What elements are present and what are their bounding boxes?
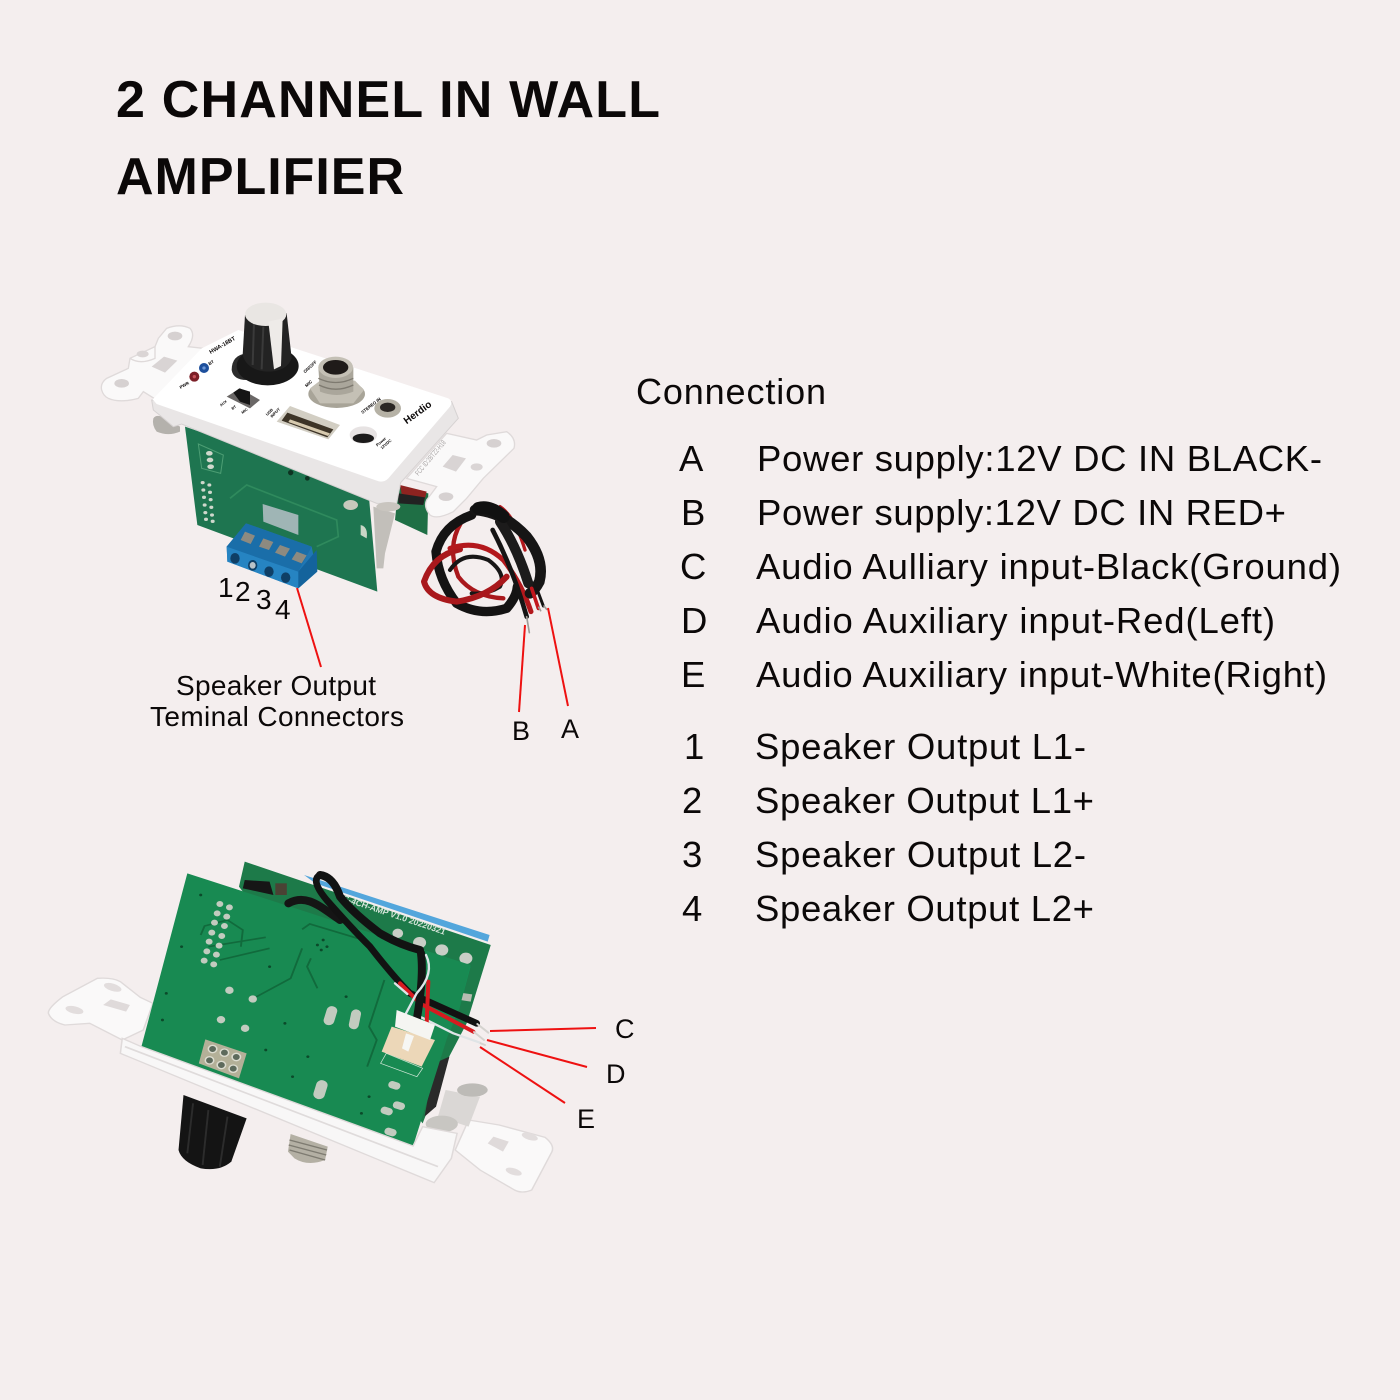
callout lines <box>297 588 596 1103</box>
wire labels: C <box>615 1014 634 1044</box>
connection legend: letters: A <box>679 438 704 479</box>
LED indicators: PWR <box>179 380 191 390</box>
side bracket and screws <box>425 1057 488 1132</box>
USB port <box>265 406 340 439</box>
white cable connector <box>382 1010 435 1067</box>
title <box>116 71 660 206</box>
terminal numbers <box>218 572 291 625</box>
power hole <box>350 426 393 450</box>
microphone jack <box>302 357 365 408</box>
connection legend: letters: D <box>681 600 707 641</box>
model label: HWA-18BT <box>209 336 237 356</box>
connection legend: letters: Audio Aulliary input-Black(Ground) <box>756 546 1341 587</box>
stereo input jack: STEREO IN <box>360 396 382 415</box>
connection legend: numbers: 1 <box>684 726 704 767</box>
terminal numbers: 1 <box>218 572 234 603</box>
rear circuit board <box>395 487 428 535</box>
threaded jack, rear view <box>288 1134 328 1163</box>
volume knob, rear view <box>179 1095 247 1169</box>
connection legend: numbers: Speaker Output L2- <box>755 834 1086 875</box>
connection legend: letters: Power supply:12V DC IN BLACK- <box>757 438 1322 479</box>
connection legend: letters: C <box>680 546 706 587</box>
wire labels: D <box>606 1059 626 1089</box>
connection legend: numbers <box>682 726 1094 929</box>
selector switch: AUX <box>219 399 228 407</box>
microphone jack: ON/OFF <box>302 359 318 374</box>
connection legend: numbers: Speaker Output L2+ <box>755 888 1094 929</box>
speaker output label: Teminal Connectors <box>150 701 404 732</box>
speaker output label: Speaker Output <box>176 670 376 701</box>
title: 2 CHANNEL IN WALL <box>116 71 660 129</box>
USB port: USB <box>265 407 274 417</box>
selector switch: MIC <box>241 407 249 415</box>
LED indicators: BT <box>207 359 215 366</box>
power wires <box>424 507 547 633</box>
LED indicators <box>179 359 215 390</box>
wire labels: E <box>577 1104 595 1134</box>
connection legend: letters: Power supply:12V DC IN RED+ <box>757 492 1286 533</box>
terminal numbers: 4 <box>275 594 291 625</box>
terminal numbers: 3 <box>256 584 272 615</box>
front circuit board <box>185 427 377 592</box>
audio wires and connector, back of amplifier <box>288 875 488 1067</box>
selector switch <box>219 388 260 415</box>
selector switch: BT <box>231 404 238 411</box>
power hole: 12VDC <box>379 438 393 450</box>
wire labels <box>512 714 634 1134</box>
right mounting ear <box>407 432 515 517</box>
rear circuit board <box>239 862 491 1123</box>
wire labels: B <box>512 716 530 746</box>
solder pad block <box>199 1039 247 1078</box>
product photo: back of amplifier <box>48 862 553 1192</box>
brand logo: Herdio <box>402 399 434 427</box>
left mounting ear <box>101 326 203 401</box>
speaker output label <box>150 670 404 732</box>
connection heading: Connection <box>636 371 826 412</box>
microphone jack: MIC <box>304 379 313 388</box>
connection legend: numbers: 2 <box>682 780 702 821</box>
connection legend: numbers: 4 <box>682 888 702 929</box>
product photo: front of amplifier <box>101 303 547 633</box>
metal bracket <box>373 507 395 568</box>
white front plate <box>152 330 458 503</box>
connection legend: numbers: Speaker Output L1+ <box>755 780 1094 821</box>
product photo: front of amplifier: FCC ID:2BTZ2-H18 <box>413 438 448 477</box>
connection legend: numbers: 3 <box>682 834 702 875</box>
USB port: INPUT <box>269 406 282 419</box>
left ear <box>48 978 153 1040</box>
connection legend: letters: Audio Auxiliary input-Red(Left) <box>756 600 1275 641</box>
connection legend: letters: E <box>681 654 705 695</box>
white plate frame <box>120 1038 457 1183</box>
terminal numbers: 2 <box>235 576 251 607</box>
title: AMPLIFIER <box>116 148 404 206</box>
blue terminal block <box>227 523 317 588</box>
connection legend: letters: B <box>681 492 705 533</box>
main circuit board <box>141 873 470 1146</box>
right screw <box>376 502 400 511</box>
power hole: Power <box>375 436 387 447</box>
volume knob <box>232 303 299 385</box>
connection legend: numbers: Speaker Output L1- <box>755 726 1086 767</box>
right ear <box>455 1120 553 1192</box>
left screw <box>153 416 180 434</box>
rear circuit board: S-4CH-AMP V1.0 20220321 <box>342 894 447 936</box>
wire labels: A <box>561 714 579 744</box>
stereo input jack <box>360 396 401 418</box>
connection legend: letters <box>679 438 1341 695</box>
connection legend: letters: Audio Auxiliary input-White(Right) <box>756 654 1327 695</box>
